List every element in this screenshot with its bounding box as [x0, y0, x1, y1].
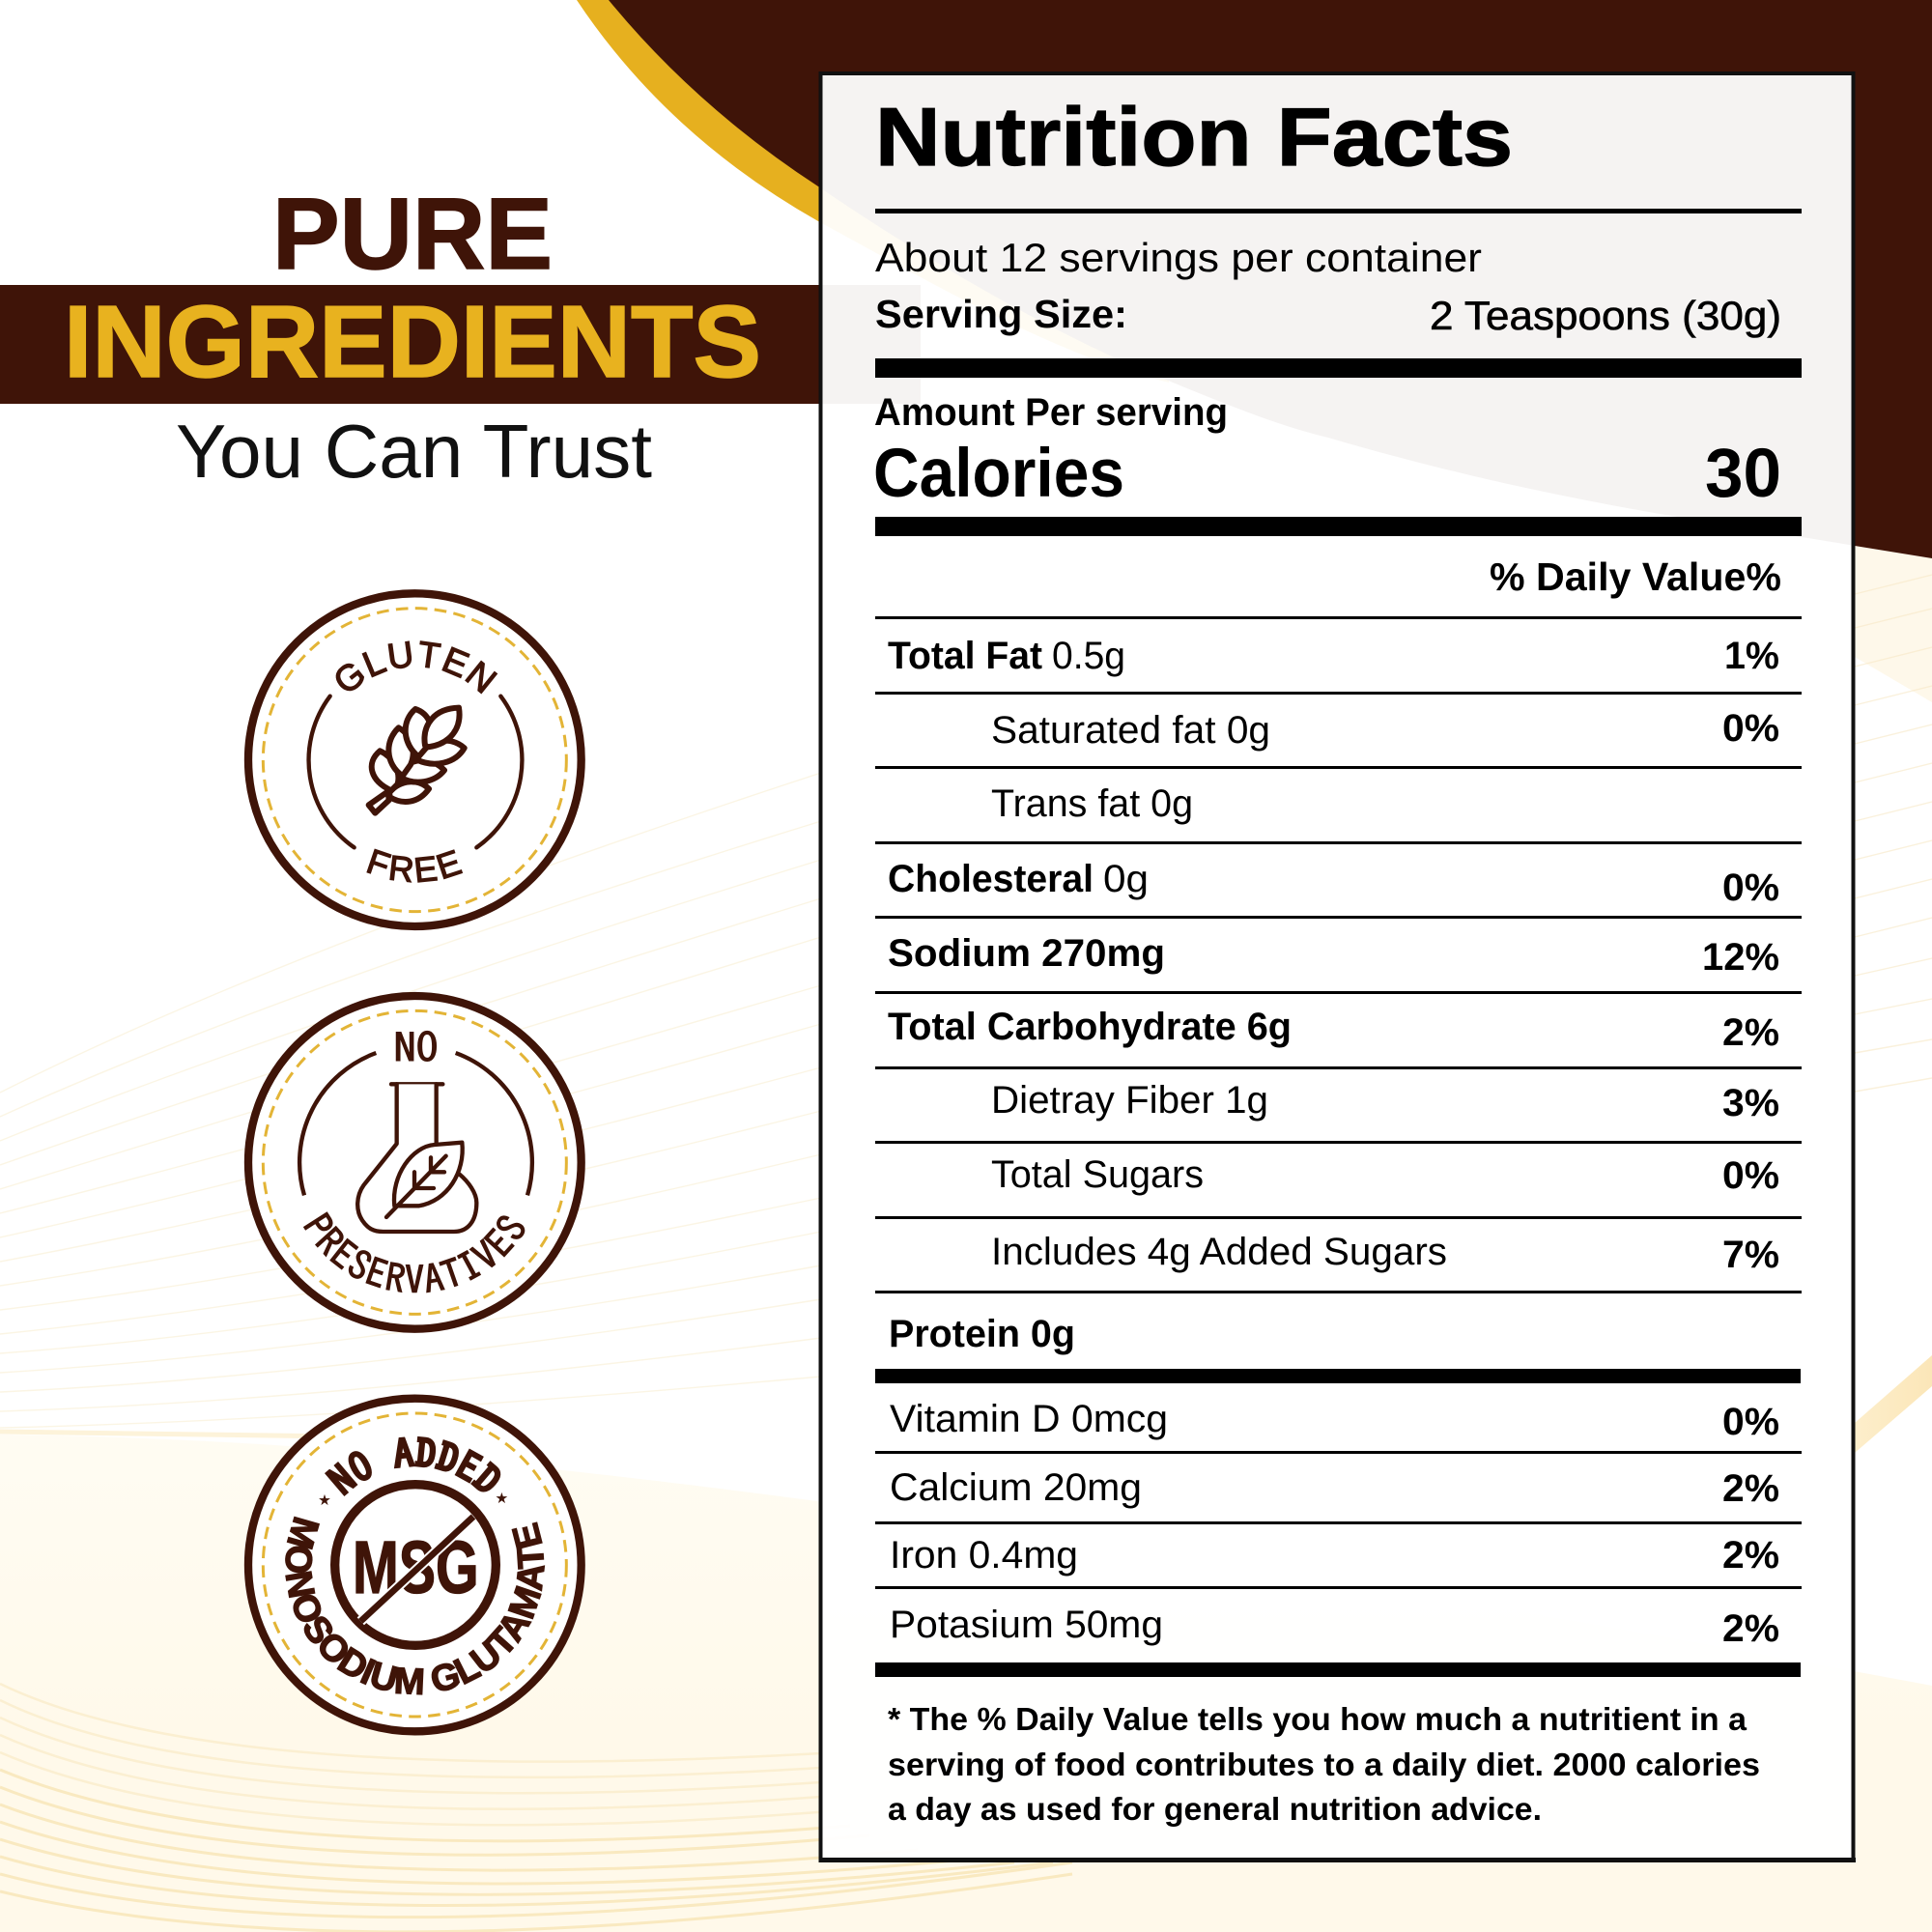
badge: no added MSG	[243, 1395, 585, 1735]
serving size	[875, 292, 1781, 338]
row: sodium: Sodium 270mg	[888, 932, 1165, 975]
footnote: * The % Daily Value tells you how much a nutritient in a	[888, 1701, 1747, 1737]
row: cholesterol	[888, 858, 1779, 909]
servings text: About 12 servings per container	[875, 235, 1482, 280]
row: vitamin D: Vitamin D 0mcg	[890, 1398, 1168, 1440]
row: added sugars	[991, 1231, 1779, 1276]
footnote	[888, 1701, 1760, 1827]
row: cholesterol: 0%	[1722, 867, 1779, 909]
badge: no added MSG: ★	[318, 1492, 331, 1509]
row: saturated fat	[991, 707, 1779, 752]
badge: gluten free: GLUTEN	[336, 640, 498, 694]
badge: no added MSG: MONOSODIUM GLUTAMATE	[285, 1517, 545, 1695]
daily value header: % Daily Value%	[1490, 554, 1781, 599]
row: total fat	[888, 635, 1779, 677]
calories: 30	[1705, 436, 1781, 512]
row: cholesterol: Cholesteral	[888, 858, 1094, 900]
row: iron	[890, 1534, 1779, 1577]
badge: no preservatives: PRESERVATIVES	[303, 1211, 526, 1293]
row: iron: 2%	[1722, 1534, 1779, 1577]
badge: gluten free: FREE	[366, 848, 464, 883]
row: total fat: Total Fat	[888, 635, 1042, 677]
row: trans fat: Trans fat 0g	[991, 782, 1193, 825]
calories: Calories	[873, 436, 1124, 512]
row: total sugars: 0%	[1722, 1154, 1779, 1197]
badge: gluten free	[243, 589, 585, 931]
row: added sugars: 7%	[1722, 1234, 1779, 1276]
rules	[875, 209, 1802, 1677]
icon: wheat	[369, 708, 465, 813]
row: total fat: 1%	[1724, 635, 1779, 677]
row: iron: Iron 0.4mg	[890, 1534, 1078, 1577]
row: saturated fat: 0%	[1722, 707, 1779, 750]
amount per serving: Amount Per serving	[874, 391, 1228, 434]
badge: no preservatives: NO	[394, 1028, 439, 1068]
row: saturated fat: Saturated fat 0g	[991, 709, 1270, 752]
row: dietary fiber: 3%	[1722, 1082, 1779, 1124]
row: total sugars	[991, 1153, 1779, 1197]
row: vitamin D	[890, 1398, 1779, 1443]
row: sodium	[888, 932, 1779, 979]
panel: nutrition facts card	[819, 73, 1856, 1862]
row: potassium: 2%	[1722, 1607, 1779, 1650]
row: total fat: 0.5g	[1052, 635, 1125, 677]
row: potassium: Potasium 50mg	[890, 1604, 1163, 1646]
icon: flask with leaf	[357, 1084, 476, 1232]
row: total carbohydrate: 2%	[1722, 1011, 1779, 1054]
heading: PURE INGREDIENTS You Can Trust	[64, 178, 761, 494]
row: cholesterol: 0g	[1103, 858, 1149, 900]
serving size: 2 Teaspoons (30g)	[1430, 293, 1781, 338]
row: total carbohydrate: Total Carbohydrate 6g	[888, 1006, 1292, 1048]
gold arc	[577, 0, 1169, 383]
footnote: a day as used for general nutrition advice.	[888, 1791, 1542, 1827]
badge: no added MSG: MSG	[353, 1526, 479, 1609]
footnote: serving of food contributes to a daily diet. 2000 calories	[888, 1747, 1760, 1782]
row: protein: Protein 0g	[889, 1313, 1075, 1355]
calories	[873, 436, 1781, 512]
row: added sugars: Includes 4g Added Sugars	[991, 1231, 1447, 1273]
row: sodium: 12%	[1702, 936, 1779, 979]
heading: PURE INGREDIENTS You Can Trust: PURE	[272, 178, 553, 291]
row: potassium	[890, 1604, 1779, 1650]
row: calcium: Calcium 20mg	[890, 1466, 1142, 1509]
row: calcium	[890, 1466, 1779, 1510]
badge: no added MSG: NO ADDED	[325, 1435, 500, 1496]
badge: no preservatives	[243, 991, 585, 1333]
badge: no added MSG: ★	[495, 1490, 508, 1507]
brown banner	[0, 285, 921, 404]
row: vitamin D: 0%	[1722, 1401, 1779, 1443]
row: calcium: 2%	[1722, 1467, 1779, 1510]
row: dietary fiber: Dietray Fiber 1g	[991, 1079, 1268, 1122]
row: dietary fiber	[991, 1079, 1779, 1124]
heading: PURE INGREDIENTS You Can Trust: You Can Trust	[176, 409, 652, 494]
heading: PURE INGREDIENTS You Can Trust: INGREDIENTS	[64, 285, 761, 399]
background cream wave lines	[0, 546, 1932, 1932]
row: total sugars: Total Sugars	[991, 1153, 1204, 1196]
heading: Nutrition Facts: Nutrition Facts	[875, 92, 1513, 184]
brown corner shape	[609, 0, 1932, 558]
serving size: Serving Size:	[875, 292, 1127, 336]
row: total carbohydrate	[888, 1006, 1779, 1054]
